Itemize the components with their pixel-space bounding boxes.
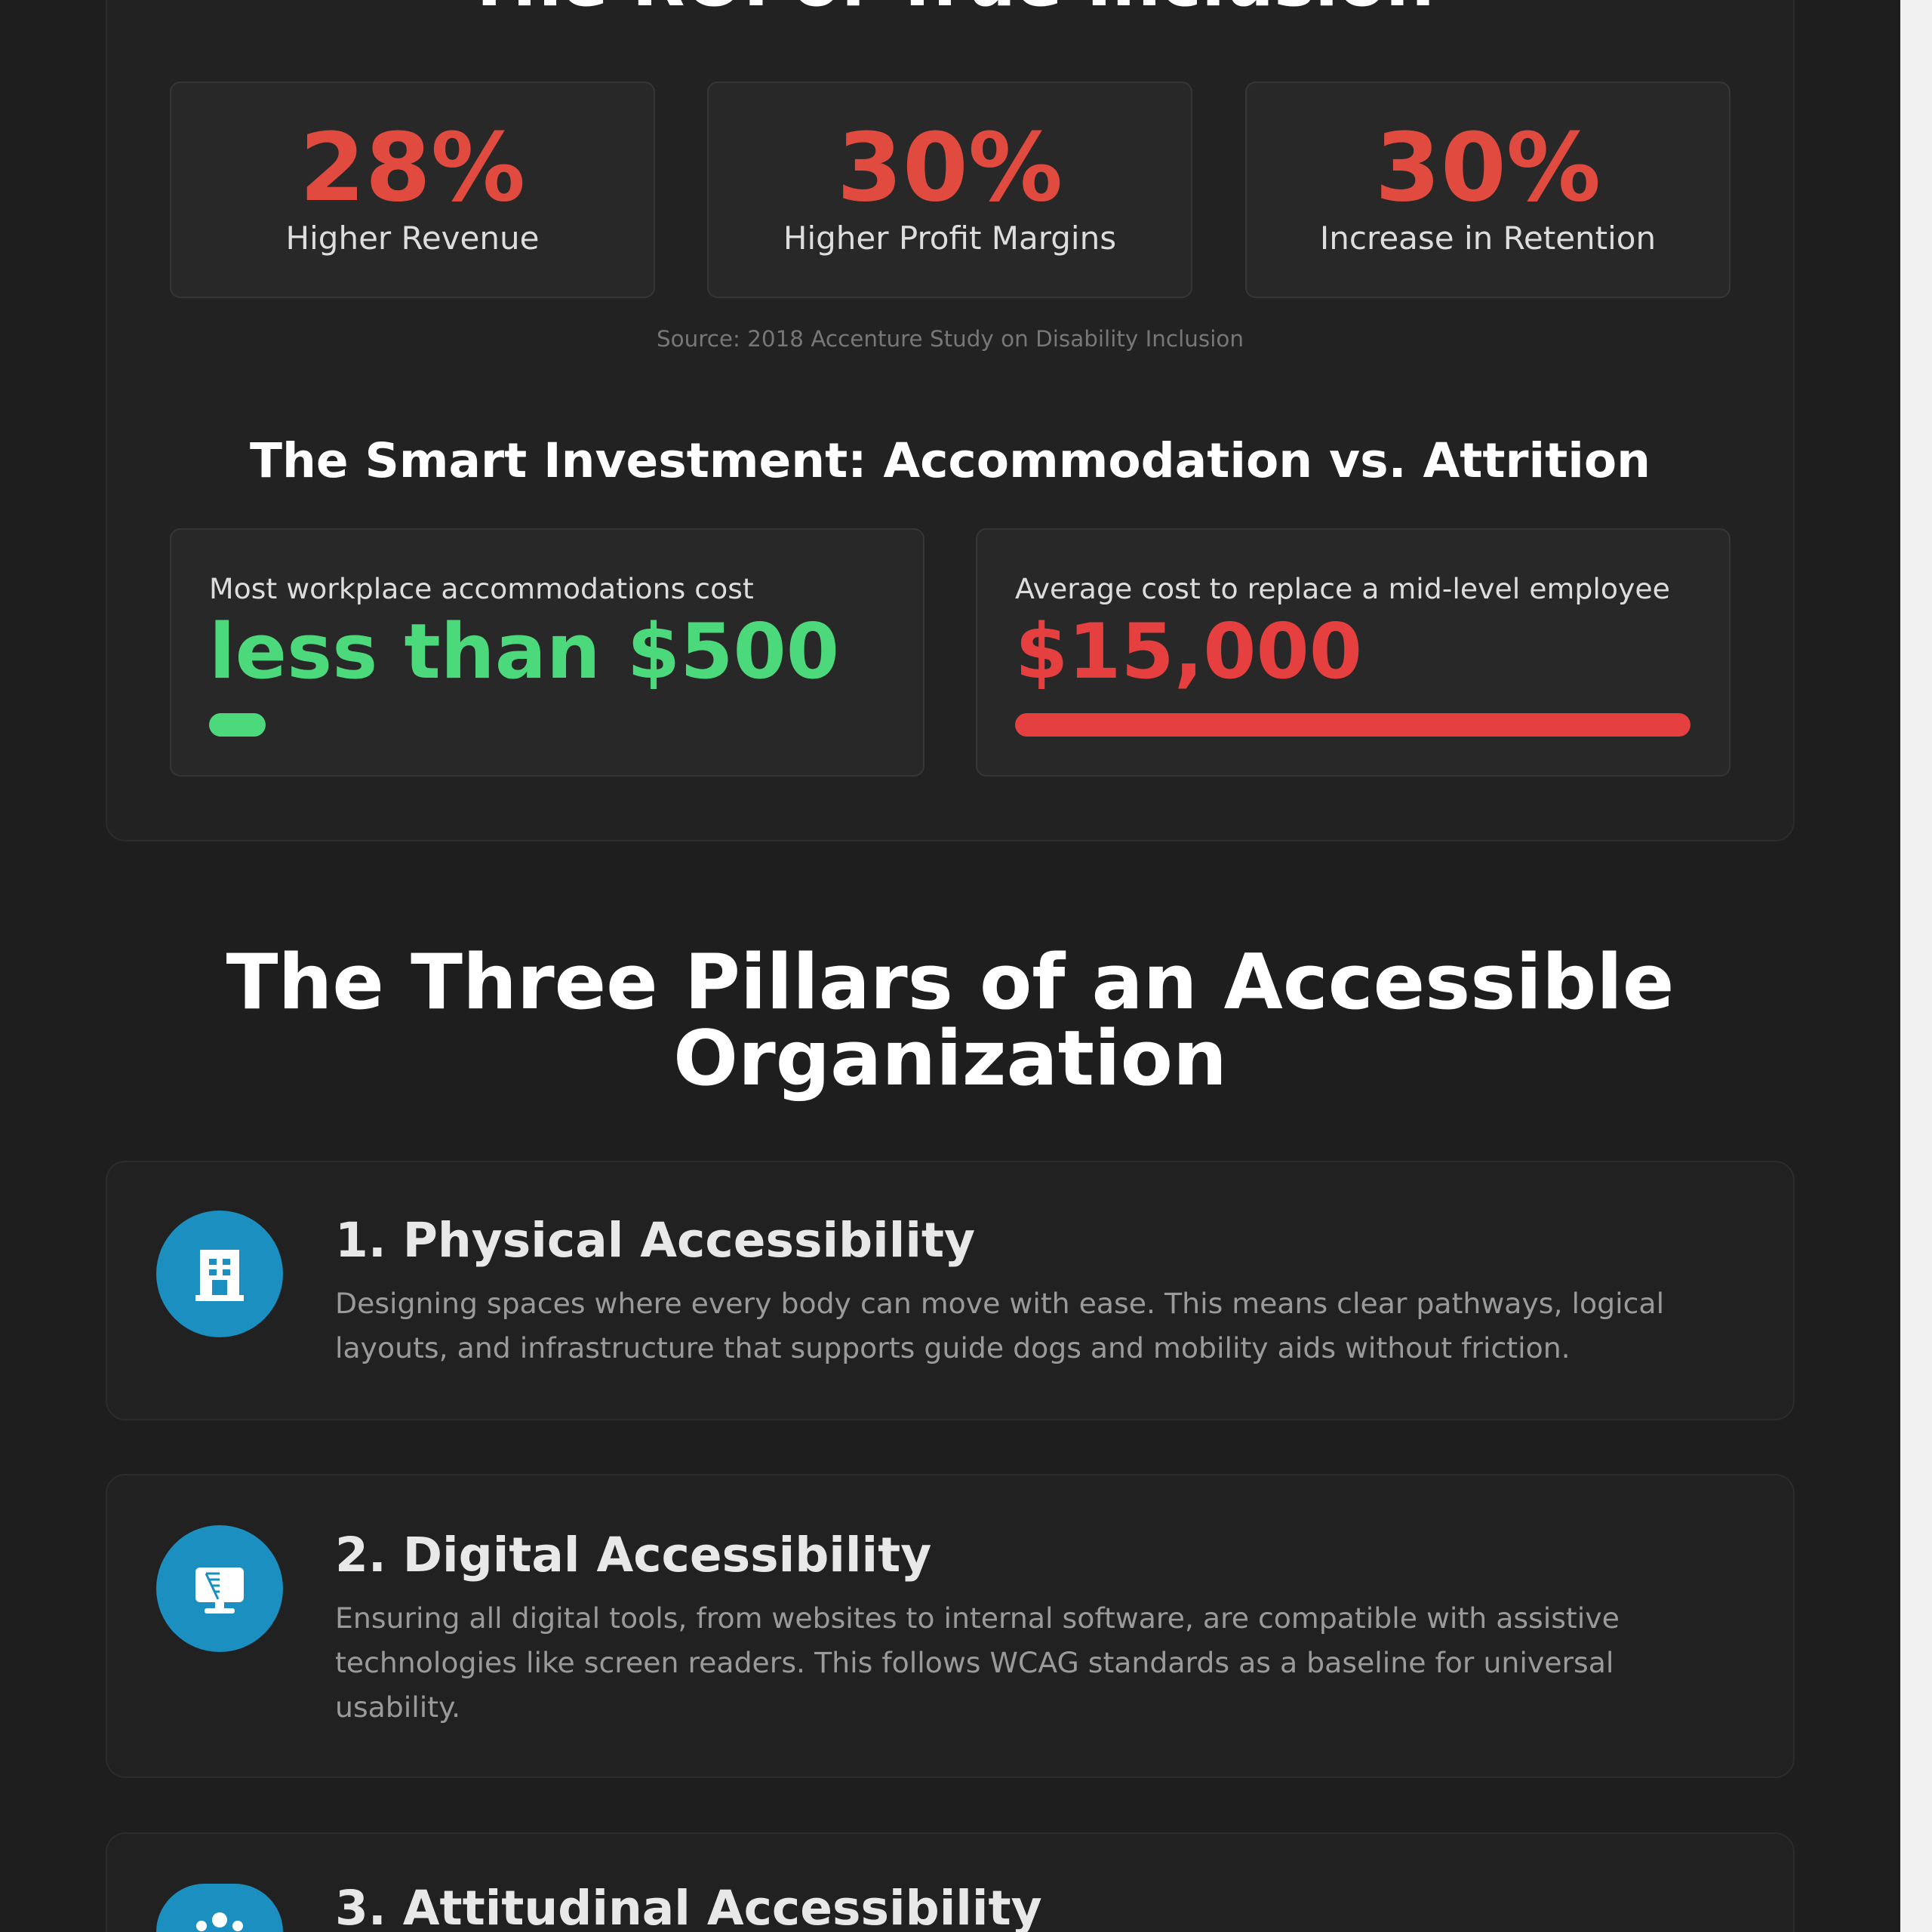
- cost card: accommodation: [170, 528, 924, 777]
- pillars heading: The Three Pillars of an Accessible: [226, 937, 1674, 1026]
- bar: accommodation: [209, 713, 266, 737]
- stat: 30% retention: 30%: [1375, 113, 1601, 223]
- pillar card 3: [106, 1832, 1795, 1932]
- stat card: profit: [707, 82, 1192, 298]
- stat label: revenue: Higher Revenue: [286, 220, 539, 257]
- pillar card 2: [106, 1474, 1795, 1778]
- icon: people: [156, 1884, 283, 1932]
- pillar 2 desc: Ensuring all digital tools, from websites to internal software, are compatible with assistive technologies like screen readers. This follows WCAG standards as a baseline for universal usability.: [335, 1601, 1620, 1724]
- pillar 2 title: 2. Digital Accessibility: [335, 1527, 931, 1583]
- cost card: attrition: [976, 528, 1730, 777]
- pillar 1 desc: Designing spaces where every body can move with ease. This means clear pathways, logical layouts, and infrastructure that supports guide dogs and mobility aids without friction.: [335, 1287, 1664, 1364]
- right scrollbar strip: [1900, 0, 1932, 1932]
- stat label: retention: Increase in Retention: [1320, 220, 1656, 257]
- stat: 28%: 28%: [300, 113, 525, 223]
- icon: monitor: [156, 1525, 283, 1652]
- bar: attrition: [1015, 713, 1690, 737]
- pillar card 1: [106, 1161, 1795, 1420]
- source note: Source: 2018 Accenture Study on Disability Inclusion: [657, 326, 1244, 352]
- accommodation value: less than $500: [209, 607, 839, 696]
- attrition value: $15,000: [1015, 607, 1362, 696]
- icon: building: [156, 1211, 283, 1337]
- pillars heading: [226, 937, 1674, 1103]
- pillar 1 title: 1. Physical Accessibility: [335, 1213, 975, 1268]
- stat label: profit: Higher Profit Margins: [783, 220, 1116, 257]
- accommodation label: Most workplace accommodations cost: [209, 572, 754, 605]
- stat card: revenue: [170, 82, 655, 298]
- stat: 30%: 30%: [837, 113, 1063, 223]
- pillars heading: Organization: [673, 1014, 1227, 1103]
- panel: ROI section: [106, 0, 1795, 841]
- attrition label: Average cost to replace a mid-level employee: [1015, 572, 1670, 605]
- subheading: The Smart Investment: Accommodation vs. Attrition: [250, 433, 1651, 488]
- stat card: retention: [1245, 82, 1730, 298]
